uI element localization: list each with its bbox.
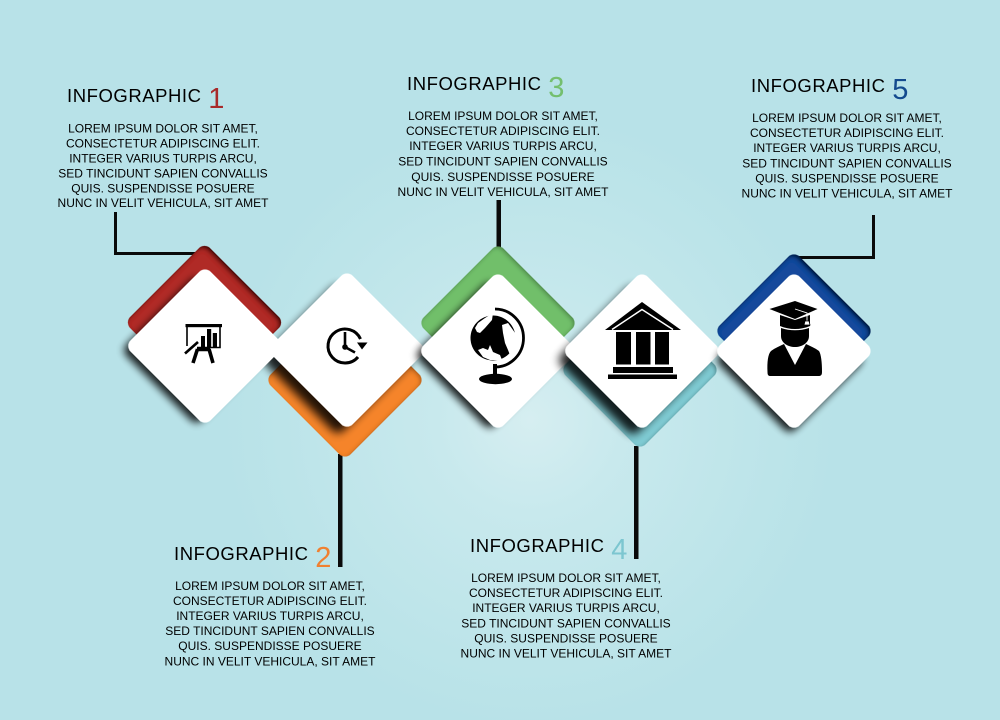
text block 5: INTEGER VARIUS TURPIS ARCU, <box>753 141 941 155</box>
text block 2: CONSECTETUR ADIPISCING ELIT. <box>173 594 367 608</box>
text block 1 <box>58 83 269 210</box>
light blue backing diamond <box>560 290 720 450</box>
text block 1: SED TINCIDUNT SAPIEN CONVALLIS <box>58 166 268 180</box>
text block 2: SED TINCIDUNT SAPIEN CONVALLIS <box>165 624 375 638</box>
text block 4: SED TINCIDUNT SAPIEN CONVALLIS <box>461 616 671 630</box>
text block 1: NUNC IN VELIT VEHICULA, SIT AMET <box>58 196 269 210</box>
connector line 1 <box>116 212 195 254</box>
text block 3: INTEGER VARIUS TURPIS ARCU, <box>409 139 597 153</box>
white diamond 1 <box>125 266 285 426</box>
orange backing diamond <box>265 300 425 460</box>
text block 5: QUIS. SUSPENDISSE POSUERE <box>755 172 939 186</box>
heading 3: 3 <box>548 72 564 104</box>
heading 5: INFOGRAPHIC <box>751 75 886 96</box>
connector line 3 <box>496 200 501 250</box>
text block 5: LOREM IPSUM DOLOR SIT AMET, <box>752 111 942 125</box>
text block 3: NUNC IN VELIT VEHICULA, SIT AMET <box>398 185 609 199</box>
white diamond 5 <box>714 271 874 431</box>
heading 3: INFOGRAPHIC <box>407 73 542 94</box>
heading 2: 2 <box>315 542 331 574</box>
text block 3: SED TINCIDUNT SAPIEN CONVALLIS <box>398 154 608 168</box>
blue backing diamond <box>714 251 874 411</box>
text block 1: LOREM IPSUM DOLOR SIT AMET, <box>68 122 258 136</box>
icon: bank building <box>605 302 681 379</box>
green backing diamond <box>418 243 578 403</box>
text block 5 <box>742 74 953 200</box>
white diamond 2 <box>267 270 427 430</box>
text block 5: CONSECTETUR ADIPISCING ELIT. <box>750 126 944 140</box>
connector line 2 <box>338 454 342 567</box>
text block 3 <box>398 72 609 199</box>
white diamond 4 <box>562 271 722 431</box>
text block 4: LOREM IPSUM DOLOR SIT AMET, <box>471 571 661 585</box>
text block 2: QUIS. SUSPENDISSE POSUERE <box>178 639 362 653</box>
connector line 4 <box>634 446 638 559</box>
icon: globe <box>470 309 524 384</box>
text block 4: NUNC IN VELIT VEHICULA, SIT AMET <box>461 646 672 660</box>
heading 2: INFOGRAPHIC <box>174 543 309 564</box>
heading 1: INFOGRAPHIC <box>67 85 202 106</box>
text block 2 <box>165 542 376 668</box>
heading 5: 5 <box>892 74 908 106</box>
connector line 5 <box>798 215 874 258</box>
text block 2: LOREM IPSUM DOLOR SIT AMET, <box>175 579 365 593</box>
text block 5: SED TINCIDUNT SAPIEN CONVALLIS <box>742 156 952 170</box>
text block 1: INTEGER VARIUS TURPIS ARCU, <box>69 152 257 166</box>
text block 2: NUNC IN VELIT VEHICULA, SIT AMET <box>165 654 376 668</box>
icon: clock with arrow <box>328 329 368 363</box>
text block 1: QUIS. SUSPENDISSE POSUERE <box>71 182 255 196</box>
text block 5: NUNC IN VELIT VEHICULA, SIT AMET <box>742 186 953 200</box>
text block 3: CONSECTETUR ADIPISCING ELIT. <box>406 124 600 138</box>
heading 4: INFOGRAPHIC <box>470 535 605 556</box>
white diamond 3 <box>418 271 578 431</box>
red backing diamond <box>125 243 284 402</box>
heading 1: 1 <box>208 83 224 115</box>
text block 4: CONSECTETUR ADIPISCING ELIT. <box>469 586 663 600</box>
heading 4: 4 <box>611 534 627 566</box>
text block 4: QUIS. SUSPENDISSE POSUERE <box>474 632 658 646</box>
text block 3: LOREM IPSUM DOLOR SIT AMET, <box>408 109 598 123</box>
text block 1: CONSECTETUR ADIPISCING ELIT. <box>66 136 260 150</box>
text block 3: QUIS. SUSPENDISSE POSUERE <box>411 170 595 184</box>
text block 4 <box>461 534 672 660</box>
icon: graduate <box>767 301 822 376</box>
text block 2: INTEGER VARIUS TURPIS ARCU, <box>176 609 364 623</box>
text block 4: INTEGER VARIUS TURPIS ARCU, <box>472 601 660 615</box>
icon: presentation board <box>185 324 222 363</box>
